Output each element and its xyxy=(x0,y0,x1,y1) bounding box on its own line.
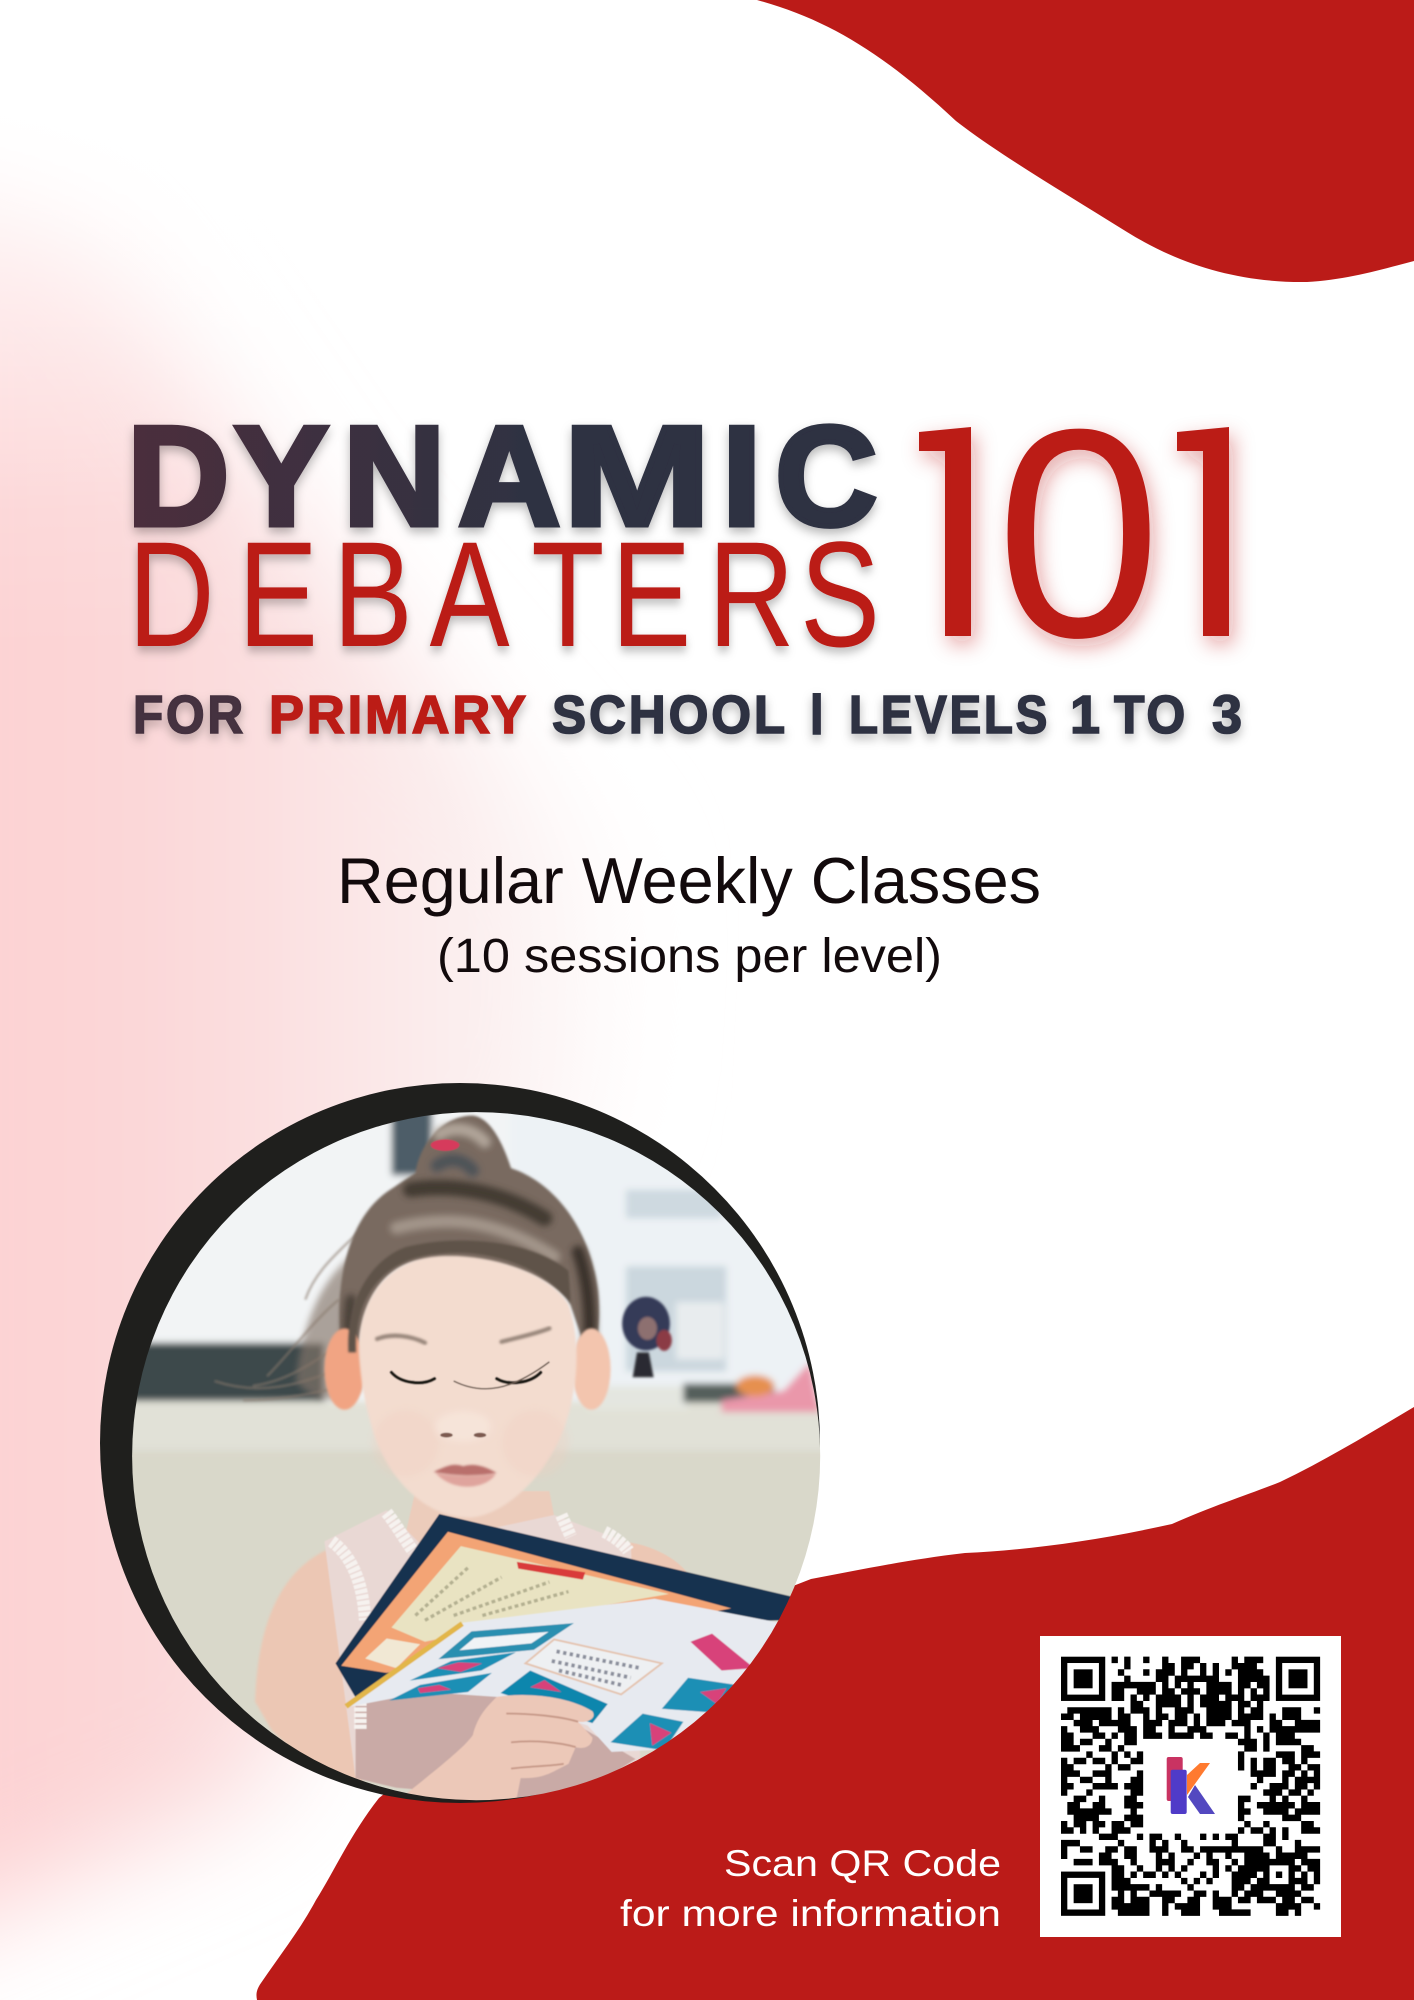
QR data xyxy=(1061,1660,1320,1913)
subtitle: for primary school levels 1 to 3: 1 xyxy=(1070,685,1103,745)
side hair mass xyxy=(293,1257,346,1403)
caption line 1: Scan QR Code xyxy=(724,1843,1001,1884)
mouth xyxy=(434,1465,497,1487)
heading: 101 xyxy=(912,424,1246,660)
book tiles xyxy=(389,1627,754,1750)
hair xyxy=(339,1115,599,1367)
red wave bottom xyxy=(256,1407,1414,2000)
photo background xyxy=(132,1112,820,1798)
neck xyxy=(406,1491,554,1542)
book cream page xyxy=(391,1546,669,1642)
text: sessions per level: (10 sessions per level) xyxy=(437,930,942,983)
face xyxy=(359,1256,577,1517)
cheek shading xyxy=(372,1410,439,1477)
QR logo xyxy=(1167,1757,1215,1814)
subtitle: for primary school levels 1 to 3: | xyxy=(811,687,825,733)
stray hair xyxy=(454,1362,549,1389)
heading: 101: 0 xyxy=(996,367,1161,699)
book orange page xyxy=(341,1532,731,1673)
heading: 101: 1 xyxy=(1156,362,1273,705)
figurine xyxy=(622,1297,672,1377)
right shoulder xyxy=(630,1542,686,1572)
left arm xyxy=(255,1548,363,1788)
caption line 2: for more information xyxy=(620,1893,1001,1934)
black ring behind photo xyxy=(100,1083,820,1803)
subtitle: for primary school levels 1 to 3 xyxy=(133,685,1245,745)
ears xyxy=(324,1328,611,1410)
hair tie xyxy=(431,1139,459,1151)
class description xyxy=(337,844,1041,983)
subtitle: for primary school levels 1 to 3: LEVELS xyxy=(849,685,1050,745)
subtitle: for primary school levels 1 to 3: PRIMARY xyxy=(269,685,529,745)
pink gradient background xyxy=(0,0,700,1960)
heading: DYNAMIC: DYNA xyxy=(127,397,561,556)
book yellow edge xyxy=(346,1624,462,1706)
subtitle: for primary school levels 1 to 3: FOR xyxy=(133,685,246,745)
subtitle: for primary school levels 1 to 3: 3 xyxy=(1212,685,1245,745)
text: regular weekly classes: Regular Weekly Classes xyxy=(337,844,1041,917)
hair wisps xyxy=(214,1233,358,1400)
red wave top right xyxy=(757,0,1414,282)
scan QR caption xyxy=(620,1843,1001,1934)
eyebrows xyxy=(377,1328,549,1343)
heading: 101: 1 xyxy=(898,362,1015,705)
heading: DEBATERS: DEBATERS xyxy=(128,510,880,678)
subtitle: for primary school levels 1 to 3: TO xyxy=(1114,685,1188,745)
heading: DYNAMIC xyxy=(127,397,878,556)
book xyxy=(335,1514,791,1752)
dress lace xyxy=(332,1513,628,1730)
book back cover xyxy=(335,1514,791,1702)
hair highlights xyxy=(349,1129,590,1367)
heading: DYNAMIC: M xyxy=(563,397,711,556)
book small sticker xyxy=(365,1638,420,1668)
subtitle: for primary school levels 1 to 3: SCHOOL xyxy=(552,685,788,745)
hand xyxy=(396,1695,594,1802)
dress xyxy=(324,1510,640,1802)
book text lines xyxy=(415,1568,568,1620)
eyes xyxy=(391,1372,541,1383)
fingers creases xyxy=(506,1714,578,1769)
heading: DYNAMIC: IC xyxy=(722,397,878,556)
QR finder patterns xyxy=(1064,1660,1317,1913)
title: DYNAMIC DEBATERS 101 xyxy=(128,423,1246,660)
fringe xyxy=(348,1240,571,1352)
QR modules xyxy=(1061,1660,1320,1913)
book white page xyxy=(346,1599,779,1752)
nose xyxy=(435,1411,491,1442)
photo: girl reading a book xyxy=(132,1112,820,1800)
book red label xyxy=(517,1562,585,1580)
QR code panel xyxy=(1040,1636,1341,1937)
